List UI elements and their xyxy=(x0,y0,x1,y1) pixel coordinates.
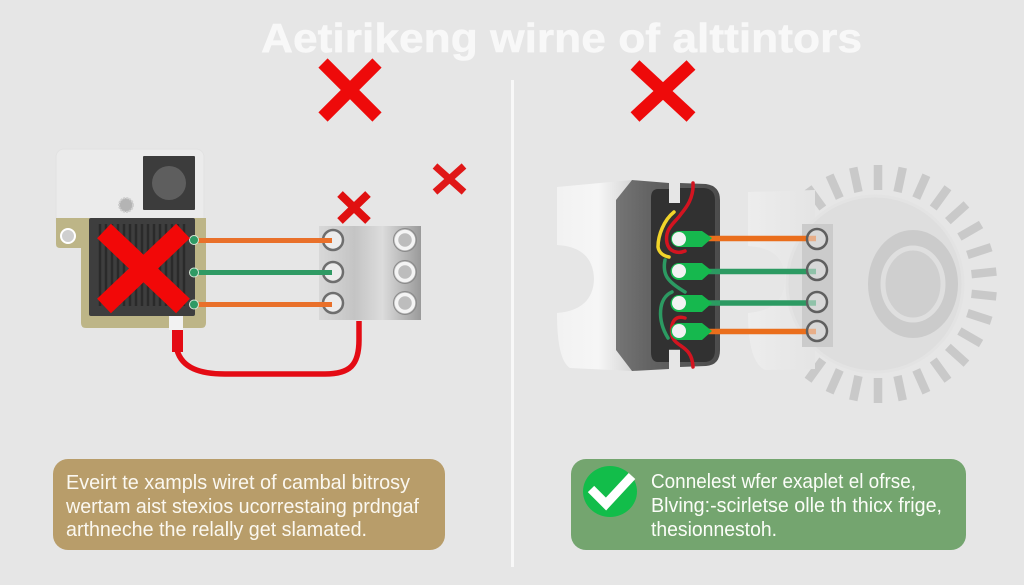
lug eyelets xyxy=(672,232,686,338)
icon: top left red cross xyxy=(323,63,377,117)
note text: Connelest wfer exaplet el ofrse, xyxy=(651,471,916,493)
green wire 3 xyxy=(708,300,816,306)
panel: incorrect note xyxy=(53,459,445,550)
internal wires xyxy=(658,183,693,367)
small screw xyxy=(119,198,133,212)
front white housing xyxy=(557,180,632,371)
large red cross xyxy=(104,231,183,306)
red wire loop xyxy=(172,321,359,374)
faded rear housing xyxy=(748,190,815,370)
icon: green check xyxy=(583,466,637,517)
green lugs xyxy=(670,231,712,340)
note text xyxy=(651,471,942,541)
note text xyxy=(65,472,419,541)
green wire 2 xyxy=(708,269,816,274)
note text: thesionnestoh. xyxy=(651,519,777,541)
alternator rotor xyxy=(868,230,958,338)
icon: small red cross right xyxy=(435,166,464,192)
green wire xyxy=(195,270,332,275)
orange wire 4 xyxy=(708,329,816,334)
alternator radial ticks xyxy=(808,165,996,403)
heatsink xyxy=(89,218,195,316)
title: Aetirikeng wirne of alttintors xyxy=(261,15,862,61)
note text: wertam aist stexios ucorrestaing prdngaf xyxy=(65,496,419,518)
mounting hole xyxy=(61,229,75,243)
strip terminals xyxy=(807,229,827,341)
module housing xyxy=(56,149,204,229)
olive circuit board xyxy=(56,218,206,328)
diagram: incorrect wiring xyxy=(56,149,421,374)
small red cross above block xyxy=(340,194,368,221)
diagram: correct wiring xyxy=(557,165,996,403)
dark sensor square xyxy=(143,156,195,210)
terminal strip xyxy=(802,224,833,347)
connector inner cavity xyxy=(651,188,715,362)
orange wire top xyxy=(195,238,332,243)
note text: arthneche the relally get slamated. xyxy=(66,519,367,541)
divider xyxy=(511,80,514,567)
note text: Blving:-scirletse olle th thicx frige, xyxy=(651,495,942,517)
white connector tab xyxy=(169,316,183,330)
panel: correct note xyxy=(571,459,966,550)
alternator disc xyxy=(787,196,963,372)
icon: top right red cross xyxy=(635,65,691,117)
orange wire 1 xyxy=(708,236,816,241)
connector body xyxy=(616,180,720,371)
note text: Eveirt te xampls wiret of cambal bitrosy xyxy=(66,472,410,494)
terminal block xyxy=(319,226,421,320)
orange wire bottom xyxy=(195,302,332,307)
block terminals xyxy=(323,228,416,314)
wire end dots xyxy=(190,236,198,309)
